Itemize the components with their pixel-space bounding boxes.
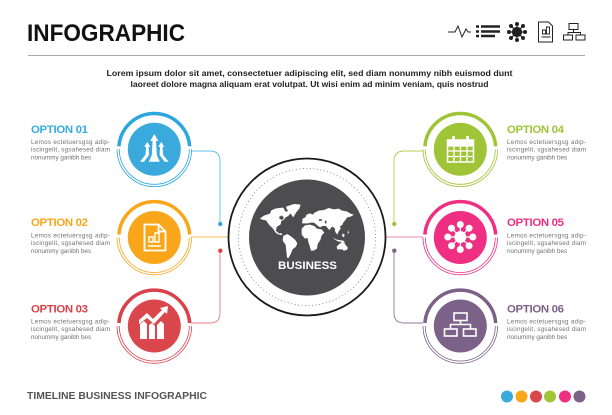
option 06 text: OPTION 06: [507, 304, 564, 316]
option 04 disc: [434, 123, 487, 176]
option 05 text: OPTION 05: [507, 217, 565, 229]
option 03 ring: [117, 290, 192, 363]
icon: hierarchy: [444, 313, 476, 336]
business label: BUSINESS: [278, 260, 337, 272]
panel: option 02: [31, 202, 192, 275]
option 01 disc: [128, 123, 181, 176]
panel: option 03: [31, 290, 192, 363]
icon: org chart: [564, 24, 585, 40]
option 05 text: [507, 217, 586, 255]
option 05 text: iscingelit, sgsahesed diam: [507, 240, 586, 247]
option 05 text: Lemos ectetuersgsg adip-: [507, 232, 586, 239]
title: INFOGRAPHIC: [27, 20, 185, 47]
option 01 text: OPTION 01: [31, 124, 89, 136]
icon: snowflake network: [507, 22, 527, 42]
world map: [260, 204, 354, 258]
panel: option 04: [423, 113, 586, 187]
top icons: [448, 22, 585, 42]
icon: calendar: [448, 136, 474, 162]
panel: central globe: [228, 158, 386, 316]
icon: list: [476, 26, 500, 36]
option 01 text: nonummy ganibh bes: [31, 154, 91, 161]
option 03 text: Lemos ectetuersgsg adip-: [31, 318, 110, 326]
option 02 disc: [128, 211, 181, 264]
outer ring: [228, 158, 386, 316]
panel: option 06: [423, 290, 586, 363]
option 03 text: OPTION 03: [31, 304, 88, 316]
icon: pulse: [448, 26, 471, 37]
option 05 text: nonummy ganibh bes: [507, 248, 567, 255]
option 04 text: iscingelit, sgsahesed diam: [507, 147, 586, 154]
option 01 ring: [117, 113, 192, 187]
option 04 text: OPTION 04: [507, 124, 565, 136]
option 01 text: iscingelit, sgsahesed diam: [31, 147, 110, 154]
option 03 text: nonummy ganibh bes: [31, 334, 91, 341]
option 06 text: iscingelit, sgsahesed diam: [507, 326, 586, 333]
intro text: Lorem ipsum dolor sit amet, consectetuer adipiscing elit, sed diam nonummy nibh euismod dunt: [106, 68, 513, 78]
option 06 text: [507, 304, 586, 341]
dark disc: [249, 180, 365, 296]
option 05 ring: [423, 202, 498, 275]
icon: arrows up: [140, 134, 169, 162]
option 02 ring: [117, 202, 192, 275]
icon: growth chart: [139, 306, 168, 339]
header rule: [28, 54, 585, 56]
dotted ring: [238, 168, 376, 306]
option 02 text: OPTION 02: [31, 217, 88, 229]
option 02 text: nonummy ganibh bes: [31, 248, 91, 255]
option 06 text: nonummy ganibh bes: [507, 334, 567, 341]
option 02 text: Lemos ectetuersgsg adip-: [31, 232, 110, 239]
option 01 text: Lemos ectetuersgsg adip-: [31, 139, 110, 146]
intro text: laoreet dolore magna aliquam erat volutpat. Ut wisi enim ad minim veniam, quis nostrud: [130, 79, 488, 89]
colour dots: [501, 390, 586, 402]
icon: document: [538, 22, 552, 42]
option 03 text: iscingelit, sgsahesed diam: [31, 326, 110, 333]
option 06 ring: [423, 290, 498, 363]
footer label: TIMELINE BUSINESS INFOGRAPHIC: [27, 391, 207, 402]
option 04 text: Lemos ectetuersgsg adip-: [507, 139, 586, 146]
option 02 text: iscingelit, sgsahesed diam: [31, 240, 110, 247]
icon: hub network: [444, 221, 476, 253]
option 01 text: [31, 124, 110, 161]
panel: option 01: [31, 113, 192, 187]
intro text: [106, 68, 513, 89]
option 04 text: nonummy ganibh bes: [507, 154, 567, 161]
option 02 text: [31, 217, 110, 255]
option 03 disc: [128, 300, 181, 352]
option 04 text: [507, 124, 586, 161]
option 04 ring: [423, 113, 498, 187]
panel: option 05: [423, 202, 586, 275]
option 06 text: Lemos ectetuersgsg adip-: [507, 318, 586, 326]
option 05 disc: [434, 211, 487, 264]
icon: document chart: [144, 224, 166, 250]
option 03 text: [31, 304, 110, 341]
option 06 disc: [434, 300, 487, 352]
connectors: [191, 151, 423, 323]
